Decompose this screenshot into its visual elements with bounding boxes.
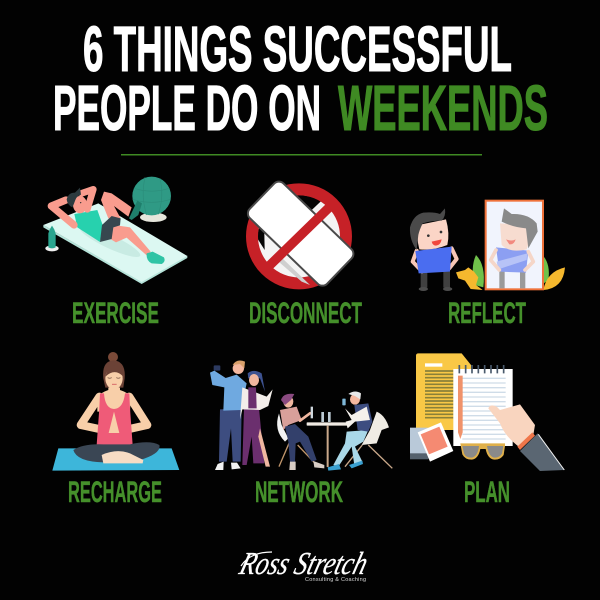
illustration: woman meditating on a mat bbox=[52, 352, 179, 471]
label: reflect: REFLECT bbox=[448, 297, 526, 330]
panel: disconnect bbox=[245, 179, 362, 330]
standing couple bbox=[210, 361, 273, 470]
seated man bbox=[328, 391, 392, 471]
illustration: man doing sit-ups on a mat bbox=[43, 177, 187, 284]
logo: Ross Stretch: Consulting & Coaching bbox=[305, 577, 366, 583]
panel: exercise bbox=[43, 177, 187, 330]
table with glasses bbox=[307, 412, 347, 467]
label: plan: PLAN bbox=[464, 476, 510, 509]
label: network: NETWORK bbox=[255, 476, 343, 509]
title bbox=[53, 13, 548, 144]
title: PEOPLE DO ON bbox=[53, 72, 321, 144]
panel: plan bbox=[410, 353, 564, 509]
seated woman bbox=[277, 394, 324, 470]
illustration: man looking in a mirror bbox=[410, 201, 565, 291]
icon: phone with prohibition sign bbox=[245, 179, 356, 288]
logo: Ross Stretch: Ross Stretch bbox=[235, 547, 372, 582]
label: exercise: EXERCISE bbox=[72, 297, 159, 330]
panel: reflect bbox=[410, 201, 565, 330]
illustration: documents, notebook and hand bbox=[410, 353, 564, 471]
label: disconnect: DISCONNECT bbox=[249, 297, 362, 330]
panel: recharge bbox=[52, 352, 179, 509]
label: recharge: RECHARGE bbox=[68, 476, 162, 509]
illustration: people socialising around a table bbox=[210, 361, 392, 471]
panel: network bbox=[210, 361, 392, 509]
